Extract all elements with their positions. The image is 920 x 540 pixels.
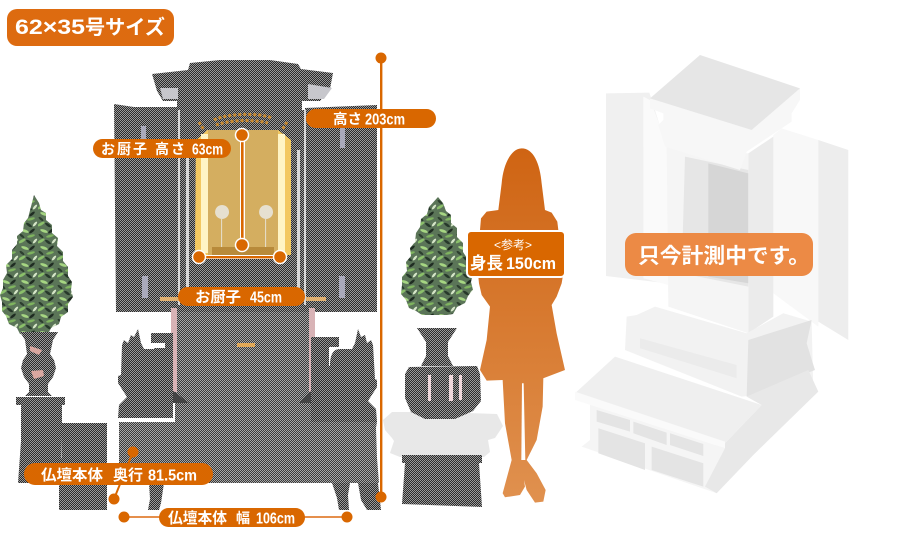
size heading: 62×35 — [15, 16, 85, 39]
label: cabinet inner height: 63cm — [192, 142, 223, 158]
base — [113, 422, 379, 483]
inner height marker — [236, 128, 248, 252]
label: overall height — [306, 109, 436, 128]
vase — [20, 332, 58, 396]
label: body depth: 81.5cm — [148, 468, 197, 484]
label: reference height — [467, 231, 565, 277]
label: body width — [159, 508, 305, 528]
label: body width: 106cm — [256, 510, 295, 528]
gold interior — [195, 114, 291, 255]
ghost body — [667, 147, 748, 333]
door highlights — [141, 126, 345, 298]
pot — [405, 366, 481, 419]
stool — [402, 455, 482, 507]
pot highlights — [428, 375, 462, 401]
right plant with pot, cushions and stool — [383, 197, 503, 507]
label: reference height: <参考> — [494, 238, 532, 252]
label: reference height: 150cm — [506, 254, 556, 273]
label: overall height: 203cm — [365, 112, 405, 128]
inner width marker — [192, 250, 286, 264]
main height line — [376, 52, 386, 502]
foliage — [0, 195, 73, 334]
label: cabinet inner width: お厨子 — [195, 289, 241, 306]
cabinet — [177, 110, 307, 312]
label: cabinet inner width — [178, 287, 305, 306]
left lantern — [118, 329, 173, 418]
candle flowers — [215, 205, 273, 247]
label: cabinet inner height: お厨子 高さ — [101, 141, 185, 157]
label: body width: 幅 — [236, 510, 250, 526]
roof undersides — [160, 84, 332, 99]
label: body depth: 奥行 — [113, 467, 143, 484]
box — [59, 423, 107, 510]
cabinet pillars — [178, 110, 306, 305]
foliage — [401, 197, 473, 315]
ghost steps — [625, 307, 813, 397]
size heading: 号サイズ — [85, 15, 165, 39]
legs — [148, 483, 381, 510]
leg gap — [521, 383, 525, 460]
gold ornament — [199, 114, 287, 130]
label: cabinet inner height — [93, 139, 231, 158]
woman silhouette — [468, 148, 565, 503]
label: reference height: 身長 — [470, 254, 503, 273]
label: body width: 仏壇本体 — [168, 509, 227, 527]
notice: measuring in progress: 只今計測中です。 — [638, 245, 810, 268]
ghost drawers — [597, 410, 703, 487]
ghost butsudan under measurement — [575, 55, 848, 493]
main butsudan — [113, 60, 381, 510]
roof — [152, 60, 333, 131]
depth marker — [108, 446, 138, 504]
candle feet — [159, 390, 329, 403]
body — [468, 148, 565, 503]
label: body depth: 仏壇本体 — [41, 466, 103, 484]
ghost table top — [575, 357, 762, 443]
label: overall height: 高さ — [333, 111, 362, 127]
stand — [16, 397, 65, 483]
side candle stands — [171, 308, 315, 392]
centre incense plate — [237, 343, 255, 347]
ghost table lower side — [703, 370, 818, 493]
notice: measuring in progress — [625, 233, 813, 276]
ghost roof — [650, 88, 800, 170]
right lantern — [311, 329, 377, 422]
doors — [114, 104, 377, 312]
ghost doors — [606, 93, 667, 283]
vase flowers — [30, 346, 44, 379]
lower body — [175, 312, 311, 422]
size heading — [7, 9, 174, 46]
candle plates — [160, 297, 326, 301]
left plant with vase and stand — [0, 195, 107, 510]
label: cabinet inner width: 45cm — [250, 290, 282, 306]
vase neck — [417, 328, 457, 366]
cushions — [383, 412, 503, 457]
label: body depth — [24, 463, 213, 485]
ghost table front — [582, 403, 725, 493]
width marker — [118, 512, 352, 522]
